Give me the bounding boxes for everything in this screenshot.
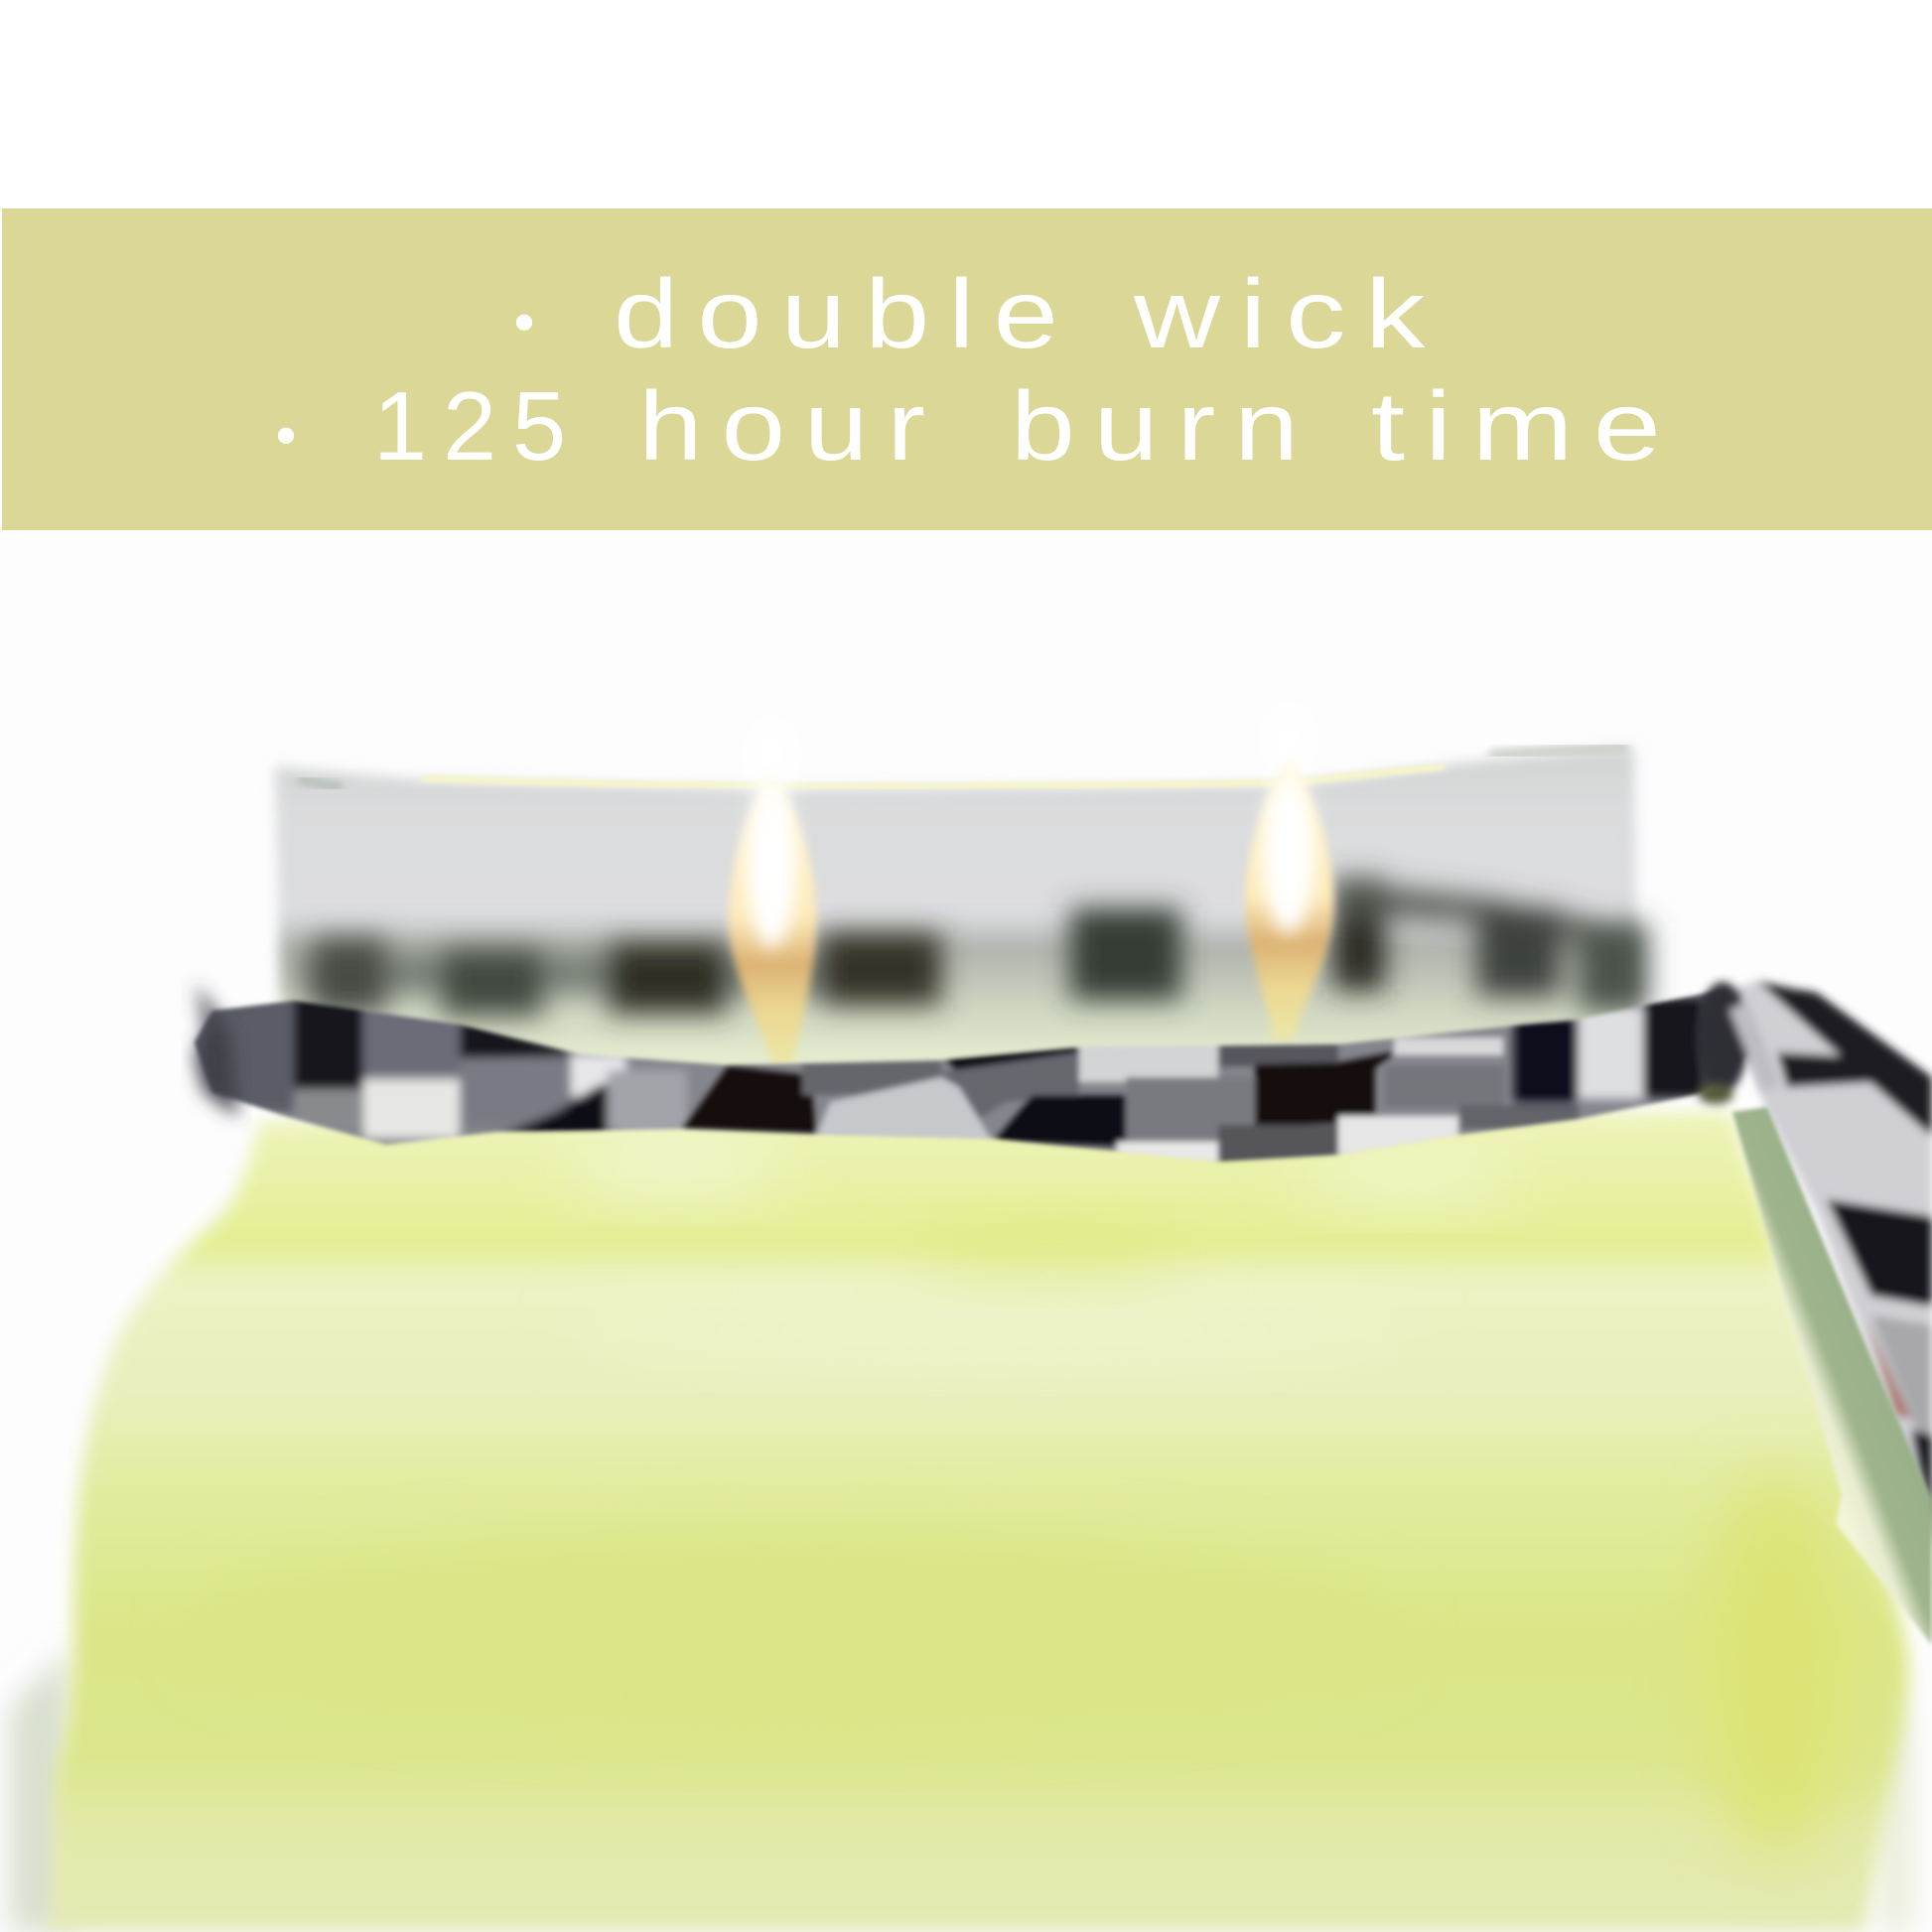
banner line 1 [513, 259, 1445, 368]
banner line 2 [275, 371, 1681, 481]
jar neck glass [275, 747, 1638, 1082]
banner background [2, 208, 1932, 530]
banner [2, 208, 1932, 530]
ribbon band [179, 983, 1767, 1172]
left blurred checks [179, 993, 687, 1139]
sharp checks [682, 1037, 1579, 1165]
banner line 1: double [614, 259, 1077, 368]
hang tag [1732, 1107, 1932, 1645]
jar lower glass [10, 1648, 1911, 1932]
banner line 2: hour [638, 371, 944, 481]
banner line 2: 125 [373, 371, 582, 481]
wax body [50, 1112, 1909, 1932]
photo background [0, 530, 1932, 1932]
rim highlight [298, 747, 1628, 787]
flame glow [750, 705, 1311, 789]
banner line 2: time [1371, 371, 1681, 481]
candle jar photo [10, 705, 1932, 1932]
ribbon tail [1723, 981, 1932, 1549]
reflected ribbon band in glass [298, 879, 1648, 1016]
wax shading [199, 1148, 1847, 1857]
banner line 2: • [275, 402, 297, 469]
ribbon frayed end [195, 983, 238, 1117]
ribbon knot [1697, 982, 1781, 1104]
banner line 2: burn [1011, 371, 1317, 481]
banner line 1: • [513, 289, 535, 355]
flame left [729, 769, 816, 1064]
flame right [1245, 755, 1333, 1039]
banner line 1: wick [1133, 259, 1445, 368]
